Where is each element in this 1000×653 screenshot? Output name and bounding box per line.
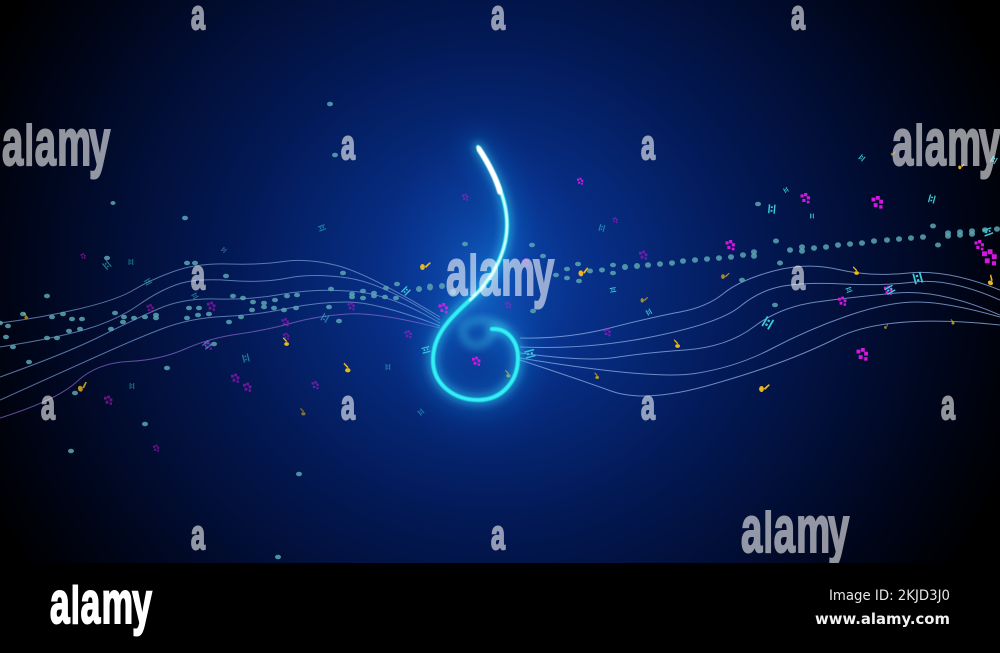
watermark: small alamy marks: a xyxy=(941,383,956,429)
watermark: small alamy marks: a xyxy=(341,383,356,429)
watermark: small alamy marks: a xyxy=(341,123,356,169)
watermark: small alamy marks: a xyxy=(191,253,206,299)
watermark: large alamy marks: alamy xyxy=(2,106,110,180)
note dots stream xyxy=(0,102,1000,559)
website: www.alamy.com xyxy=(815,610,950,628)
watermark: large alamy marks xyxy=(2,106,1000,567)
image id: Image ID: 2KJD3J0 xyxy=(829,588,950,604)
stave lines right xyxy=(520,266,1000,396)
central glow xyxy=(377,110,587,460)
footer bar xyxy=(0,563,1000,653)
watermark: small alamy marks: a xyxy=(791,253,806,299)
teal notes xyxy=(102,154,998,416)
stave lines left xyxy=(0,260,440,418)
watermark: large alamy marks: alamy xyxy=(892,106,1000,180)
yellow notes xyxy=(23,151,997,415)
watermark: small alamy marks: a xyxy=(41,383,56,429)
watermark: large alamy marks: alamy xyxy=(446,236,554,310)
watermark: small alamy marks: a xyxy=(641,123,656,169)
watermark: small alamy marks xyxy=(41,0,956,559)
watermark: large alamy marks: alamy xyxy=(741,493,849,567)
watermark: small alamy marks: a xyxy=(191,513,206,559)
watermark: small alamy marks: a xyxy=(491,513,506,559)
watermark: small alamy marks: a xyxy=(641,383,656,429)
glowing music note xyxy=(433,147,518,400)
footer logo: alamy xyxy=(50,571,152,636)
magenta notes xyxy=(80,178,997,452)
